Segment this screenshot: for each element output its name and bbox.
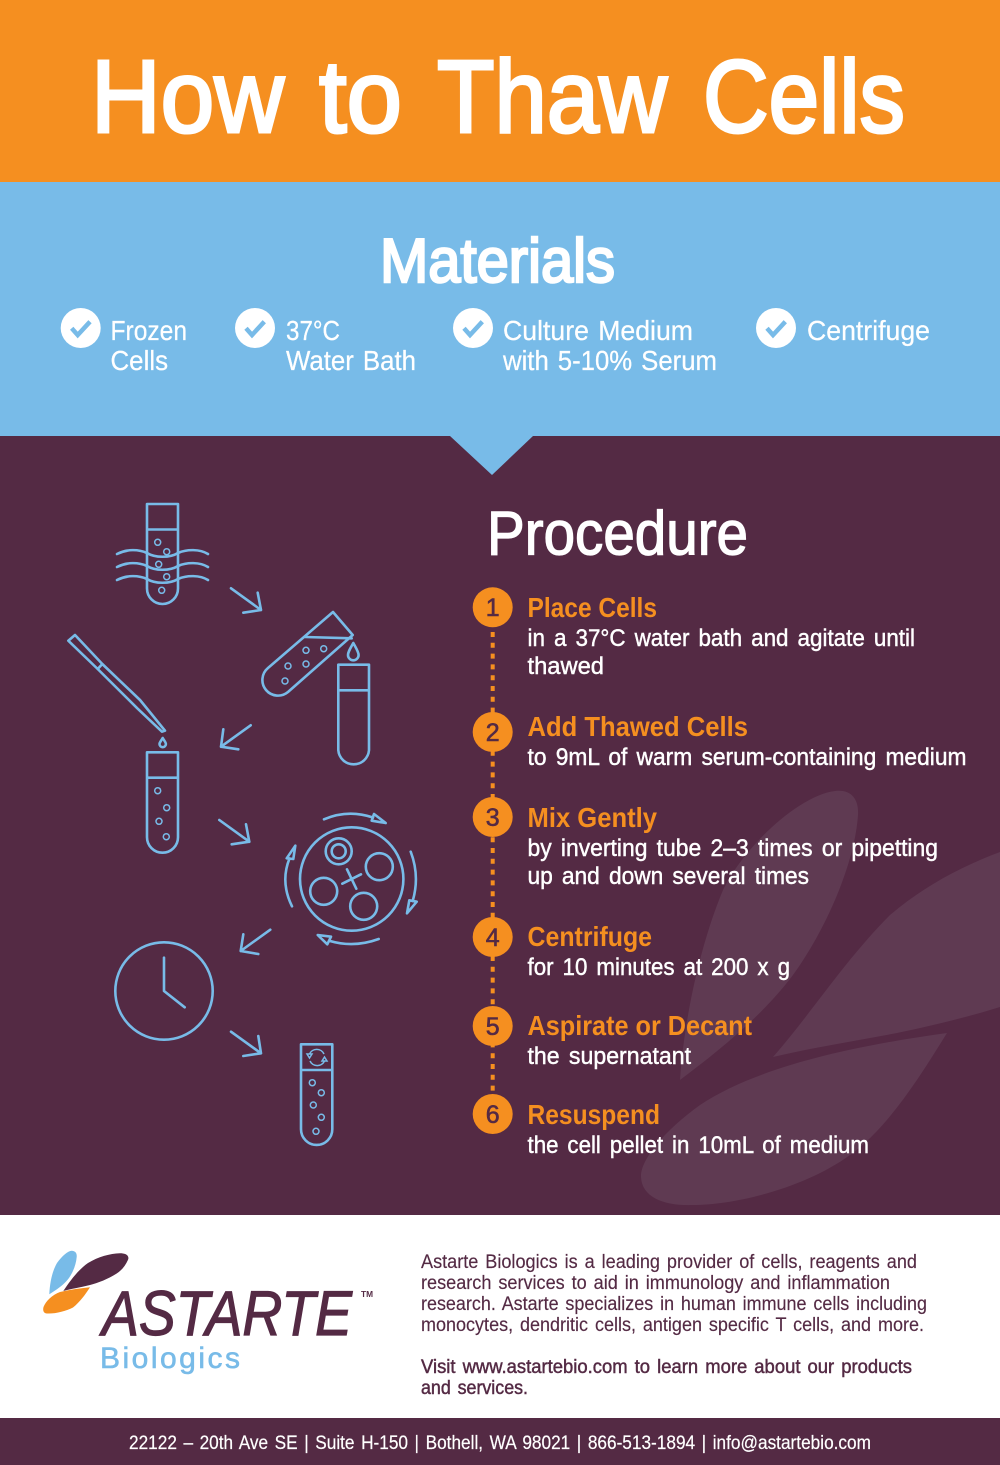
step 2 — [473, 711, 966, 771]
step 3 — [473, 797, 938, 890]
step 4 — [473, 917, 790, 981]
material: frozen cells: Cells — [110, 345, 168, 376]
step 6: 6 — [486, 1101, 500, 1129]
step 2: to 9mL of warm serum-containing medium — [528, 744, 966, 771]
panel: procedure — [0, 436, 1000, 1215]
pointer notch — [450, 436, 533, 475]
material: frozen cells — [61, 308, 187, 376]
title: to — [319, 39, 402, 154]
step 5 — [473, 1006, 752, 1070]
step 6: Resuspend — [528, 1099, 660, 1130]
panel: contact footer — [0, 1418, 1000, 1465]
step 5: Aspirate or Decant — [528, 1010, 752, 1041]
panel: company info — [0, 1215, 1000, 1418]
step 4: 4 — [486, 924, 500, 952]
material: culture medium: Culture Medium — [503, 315, 693, 346]
title — [91, 39, 905, 154]
icon: centrifuge rotor — [285, 814, 417, 944]
text block: about: research services to aid in immunology and inflammation — [421, 1273, 890, 1294]
logo: Astarte Biologics: ASTARTE — [98, 1279, 353, 1349]
icon: clock — [115, 942, 213, 1040]
background leaf watermark — [641, 791, 1000, 1205]
step 1: 1 — [486, 594, 500, 622]
step 5: 5 — [486, 1013, 500, 1041]
icon: pouring tube — [262, 612, 369, 764]
heading: procedure: Procedure — [487, 500, 748, 568]
arrow: to resuspended tube — [231, 1032, 261, 1056]
icon: resuspended tube — [301, 1044, 332, 1145]
step 3: 3 — [486, 804, 500, 832]
arrow: to clock — [241, 930, 270, 954]
title: How — [91, 39, 285, 154]
panel: title banner — [0, 0, 1000, 182]
step 4: Centrifuge — [528, 921, 652, 952]
contact details: 22122 – 20th Ave SE | Suite H-150 | Bothell, WA 98021 | 866-513-1894 | info@astartebio.com — [129, 1432, 871, 1454]
arrow: to mixing tube — [221, 725, 251, 749]
dotted timeline — [491, 632, 495, 1096]
step 5: the supernatant — [528, 1043, 691, 1070]
material: centrifuge — [756, 308, 930, 348]
icon: tube in water bath — [117, 504, 208, 604]
step 2: Add Thawed Cells — [528, 711, 748, 742]
logo: Astarte Biologics — [43, 1251, 373, 1375]
step 1 — [473, 587, 915, 680]
text block: about: Astarte Biologics is a leading provider of cells, reagents and — [421, 1252, 917, 1273]
text block: about — [421, 1252, 927, 1399]
title: Thaw — [437, 39, 668, 154]
material: culture medium — [453, 308, 717, 376]
arrow: to pouring tube — [231, 588, 261, 613]
arrow: to centrifuge — [219, 820, 249, 844]
step 4: for 10 minutes at 200 x g — [528, 954, 790, 981]
text block: about: and services. — [421, 1378, 528, 1399]
step 3: by inverting tube 2–3 times or pipetting — [528, 835, 938, 862]
material: water bath: Water Bath — [286, 345, 416, 376]
step 2: 2 — [486, 719, 500, 747]
illustration: thawing workflow — [68, 504, 417, 1145]
step 6 — [473, 1094, 869, 1159]
material: culture medium: with 5-10% Serum — [502, 345, 717, 376]
text block: about: Visit www.astartebio.com to learn more about our products — [421, 1357, 912, 1378]
icon: pipette — [68, 635, 166, 747]
title: Cells — [703, 39, 905, 154]
step 1: thawed — [528, 653, 604, 680]
step 3: up and down several times — [528, 863, 809, 890]
step 1: in a 37°C water bath and agitate until — [528, 625, 915, 652]
logo: Astarte Biologics: TM — [361, 1290, 373, 1299]
material: water bath: 37°C — [286, 315, 340, 346]
material: frozen cells: Frozen — [110, 315, 187, 346]
material: water bath — [235, 308, 416, 376]
text block: about: research. Astarte specializes in human immune cells including — [421, 1294, 927, 1315]
heading: materials: Materials — [380, 227, 615, 296]
text block: about: monocytes, dendritic cells, antigen specific T cells, and more. — [421, 1315, 924, 1336]
panel: materials — [0, 182, 1000, 436]
step 1: Place Cells — [528, 592, 657, 623]
icon: mixing tube — [147, 752, 178, 853]
logo: Astarte Biologics: Biologics — [100, 1342, 240, 1375]
step 6: the cell pellet in 10mL of medium — [528, 1132, 869, 1159]
material: centrifuge: Centrifuge — [807, 315, 930, 346]
step 3: Mix Gently — [528, 802, 657, 833]
